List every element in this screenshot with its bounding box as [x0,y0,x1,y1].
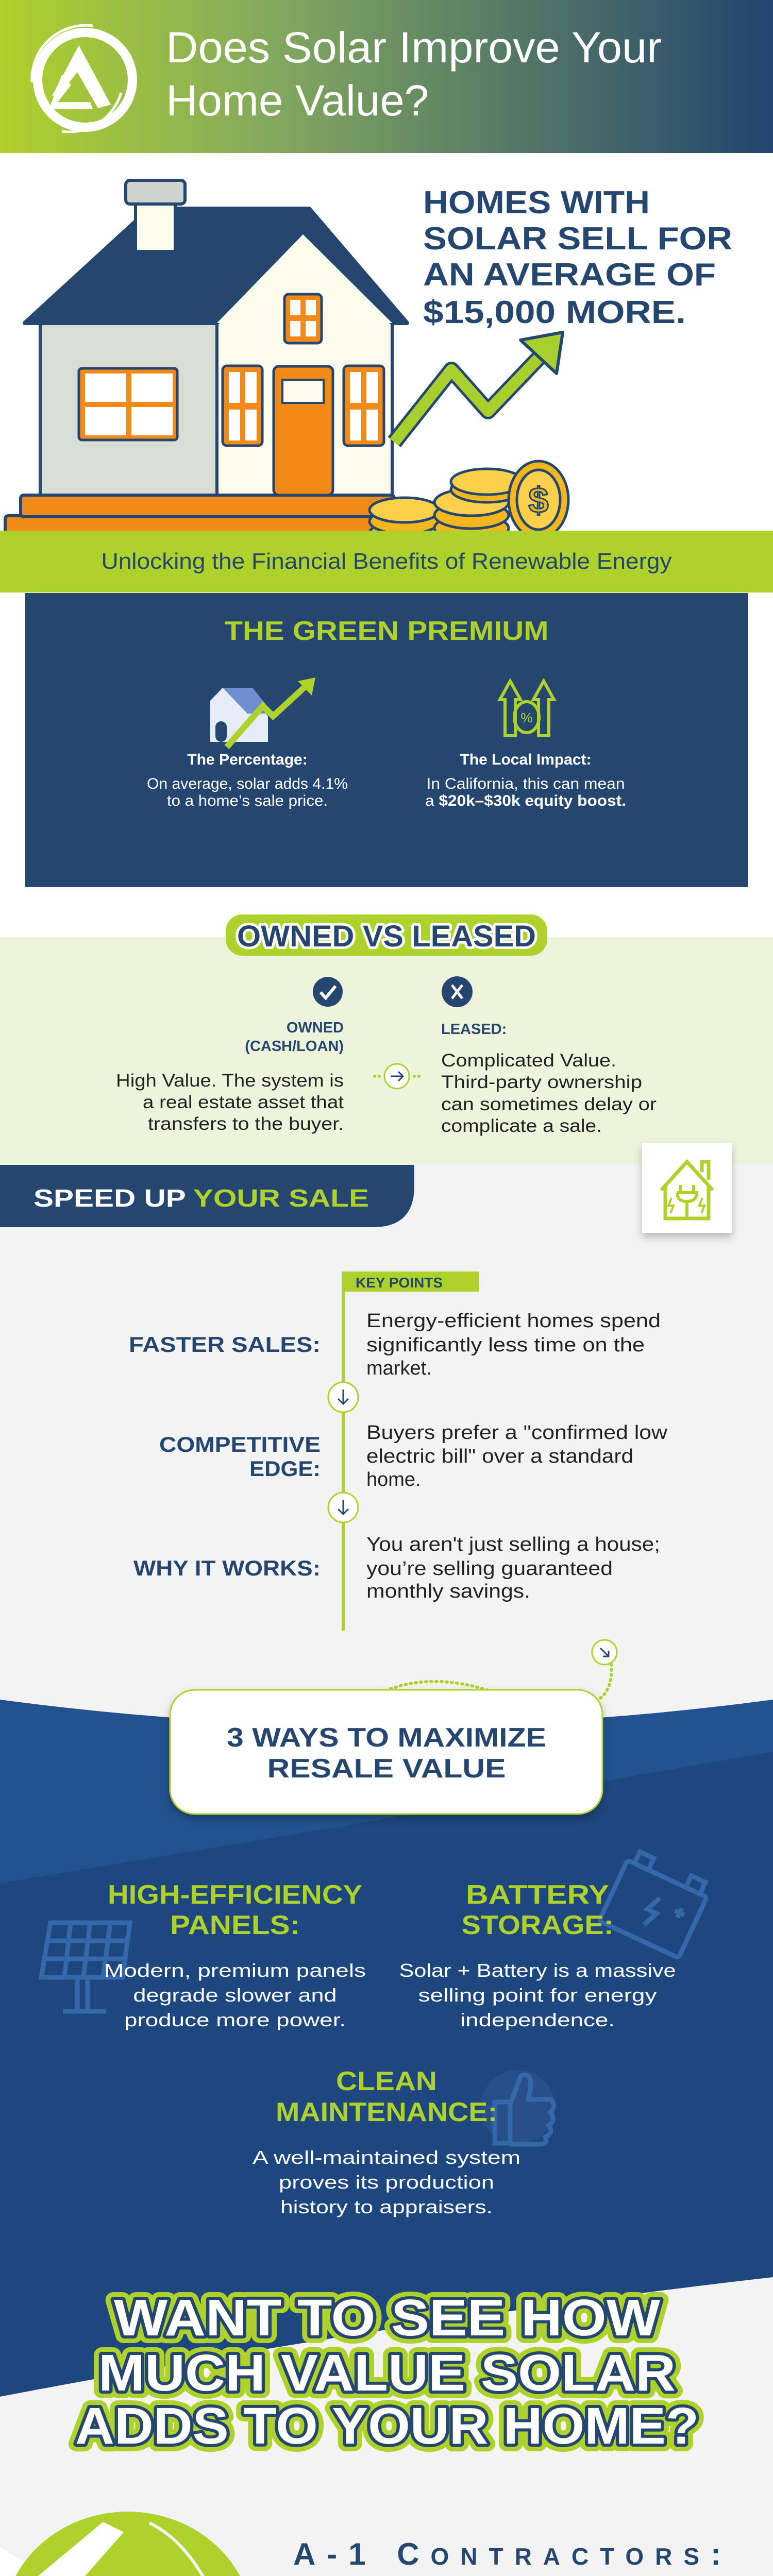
way: clean maintenance: proves its production [279,2172,494,2193]
heading tab: SPEED UP YOUR SALE [33,1185,369,1212]
text: owned: OWNED [287,1020,344,1036]
title box: 3 ways to maximize: 3 WAYS TO MAXIMIZE [227,1723,546,1753]
headline: homes with solar: $15,000 MORE. [423,295,686,330]
point: why it works: monthly savings. [366,1581,530,1602]
text: owned [116,1020,344,1134]
panel: the green premium [25,593,748,887]
way: clean maintenance: CLEAN [336,2066,437,2096]
arrow: down 2 [328,1493,358,1522]
subtitle band [0,531,773,592]
point: competitive edge: home. [366,1469,421,1490]
text: the local impact: a $20k–$30k equity boost. [425,792,626,809]
icon: percent arrows [500,681,554,736]
call to action headline: ADDS TO YOUR HOME? [75,2397,699,2455]
way: high-efficiency panels: produce more power. [124,2009,346,2030]
point: why it works: You aren't just selling a house; [366,1534,660,1555]
coins stack [369,461,568,546]
point: why it works [133,1534,660,1602]
contact area background [0,2277,773,2576]
way: battery storage: independence. [460,2009,615,2030]
icon: battery (faint) [599,1849,712,1958]
call to action headline: ADDS TO YOUR HOME? [75,2397,699,2455]
icon: thumbs up badge (faint) [481,2070,555,2144]
text: the local impact: The Local Impact: [460,751,592,768]
text: leased [441,1021,657,1136]
way: high-efficiency panels: Modern, premium panels [104,1960,366,1981]
subtitle band: Unlocking the Financial Benefits of Renewable Energy [101,549,672,574]
section: 3 ways background [0,1700,773,2397]
text: the percentage: The Percentage: [187,751,308,768]
text: leased: complicate a sale. [441,1116,602,1136]
header banner [0,0,773,153]
icon: solar panel (faint) [41,1923,130,2011]
way: battery storage: BATTERY [466,1880,609,1910]
key points tag: KEY POINTS [356,1275,443,1291]
heading: THE GREEN PREMIUM [225,616,548,646]
way: battery storage: Solar + Battery is a massive [399,1960,676,1981]
way: clean maintenance [253,2066,520,2217]
call to action headline [75,2289,699,2455]
point: faster sales: FASTER SALES: [129,1332,321,1357]
text: leased: LEASED: [441,1021,507,1038]
way: battery storage: STORAGE: [462,1910,613,1940]
coins stack: $ [529,480,548,520]
icon: solar house with arrow [210,677,315,747]
arrow: down 1 [328,1382,358,1412]
point: faster sales: Energy-efficient homes spend [366,1310,661,1332]
point: faster sales [129,1310,661,1379]
icon: house plug [642,1143,732,1233]
way: clean maintenance: MAINTENANCE: [276,2097,497,2127]
heading pill: OWNED VS LEASED [237,920,536,953]
point: why it works: you’re selling guaranteed [366,1558,613,1580]
contact text: A-1 C ONTRACTORS : [293,2537,721,2571]
title: Does Solar Improve Your [166,23,662,72]
timeline line [342,1272,345,1631]
text: the local impact [425,751,626,809]
call to action headline: WANT TO SEE HOW [114,2289,661,2347]
point: why it works: WHY IT WORKS: [133,1556,321,1580]
way: clean maintenance: A well-maintained system [253,2147,520,2168]
growth arrow [394,332,563,442]
point: competitive edge: EDGE: [249,1456,321,1481]
point: faster sales: significantly less time on the [366,1334,645,1356]
point: competitive edge: electric bill" over a standard [366,1446,633,1467]
icon: check [313,977,343,1007]
way: clean maintenance: history to appraisers. [280,2196,493,2217]
headline: homes with solar [423,185,732,330]
call to action headline: MUCH VALUE SOLAR [98,2344,676,2402]
section: owned vs leased [0,914,773,1165]
title box: 3 ways to maximize: RESALE VALUE [267,1754,506,1784]
headline: homes with solar: HOMES WITH [423,185,650,221]
point: faster sales: market. [366,1358,432,1379]
text: the percentage: On average, solar adds 4.1% [147,775,348,792]
text: owned: (CASH/LOAN) [245,1038,344,1055]
header banner: Home Value? [166,76,429,125]
hero illustration: house [5,180,407,536]
text: owned: High Value. The system is [116,1071,344,1091]
section: speed up your sale [0,1143,773,1756]
call to action headline: MUCH VALUE SOLAR [98,2344,676,2402]
heading pill: OWNED VS LEASED [237,920,536,953]
icon: percent arrows: % [520,710,533,725]
way: battery storage [399,1880,676,2030]
text: owned: transfers to the buyer. [148,1114,344,1134]
headline: homes with solar: SOLAR SELL FOR [423,221,732,257]
dotted connector [376,1640,617,1700]
title box: 3 ways to maximize [170,1690,602,1814]
text: the percentage [147,751,348,809]
headline: homes with solar: AN AVERAGE OF [423,257,716,293]
text: the local impact: In California, this can mean [427,775,625,792]
way: high-efficiency panels [104,1880,366,2030]
way: high-efficiency panels: degrade slower and [133,1985,337,2006]
heading tab [0,1165,414,1227]
text: the percentage: to a home’s sale price. [167,792,328,809]
way: high-efficiency panels: HIGH-EFFICIENCY [108,1880,362,1910]
point: competitive edge [159,1422,668,1490]
text: leased: Complicated Value. [441,1050,616,1071]
way: battery storage: selling point for energy [418,1985,657,2006]
point: competitive edge: COMPETITIVE [159,1432,321,1456]
arrow connector [373,1064,421,1089]
text: leased: Third-party ownership [441,1072,642,1092]
text: owned: a real estate asset that [143,1092,344,1112]
graphic: hammer and house logo [0,2512,240,2576]
way: high-efficiency panels: PANELS: [170,1910,300,1940]
icon: header logo [32,25,132,132]
key points tag [342,1272,479,1292]
text: leased: can sometimes delay or [441,1094,657,1114]
call to action headline: WANT TO SEE HOW [114,2289,661,2347]
point: competitive edge: Buyers prefer a "confirmed low [366,1422,668,1444]
icon: x [442,976,473,1007]
